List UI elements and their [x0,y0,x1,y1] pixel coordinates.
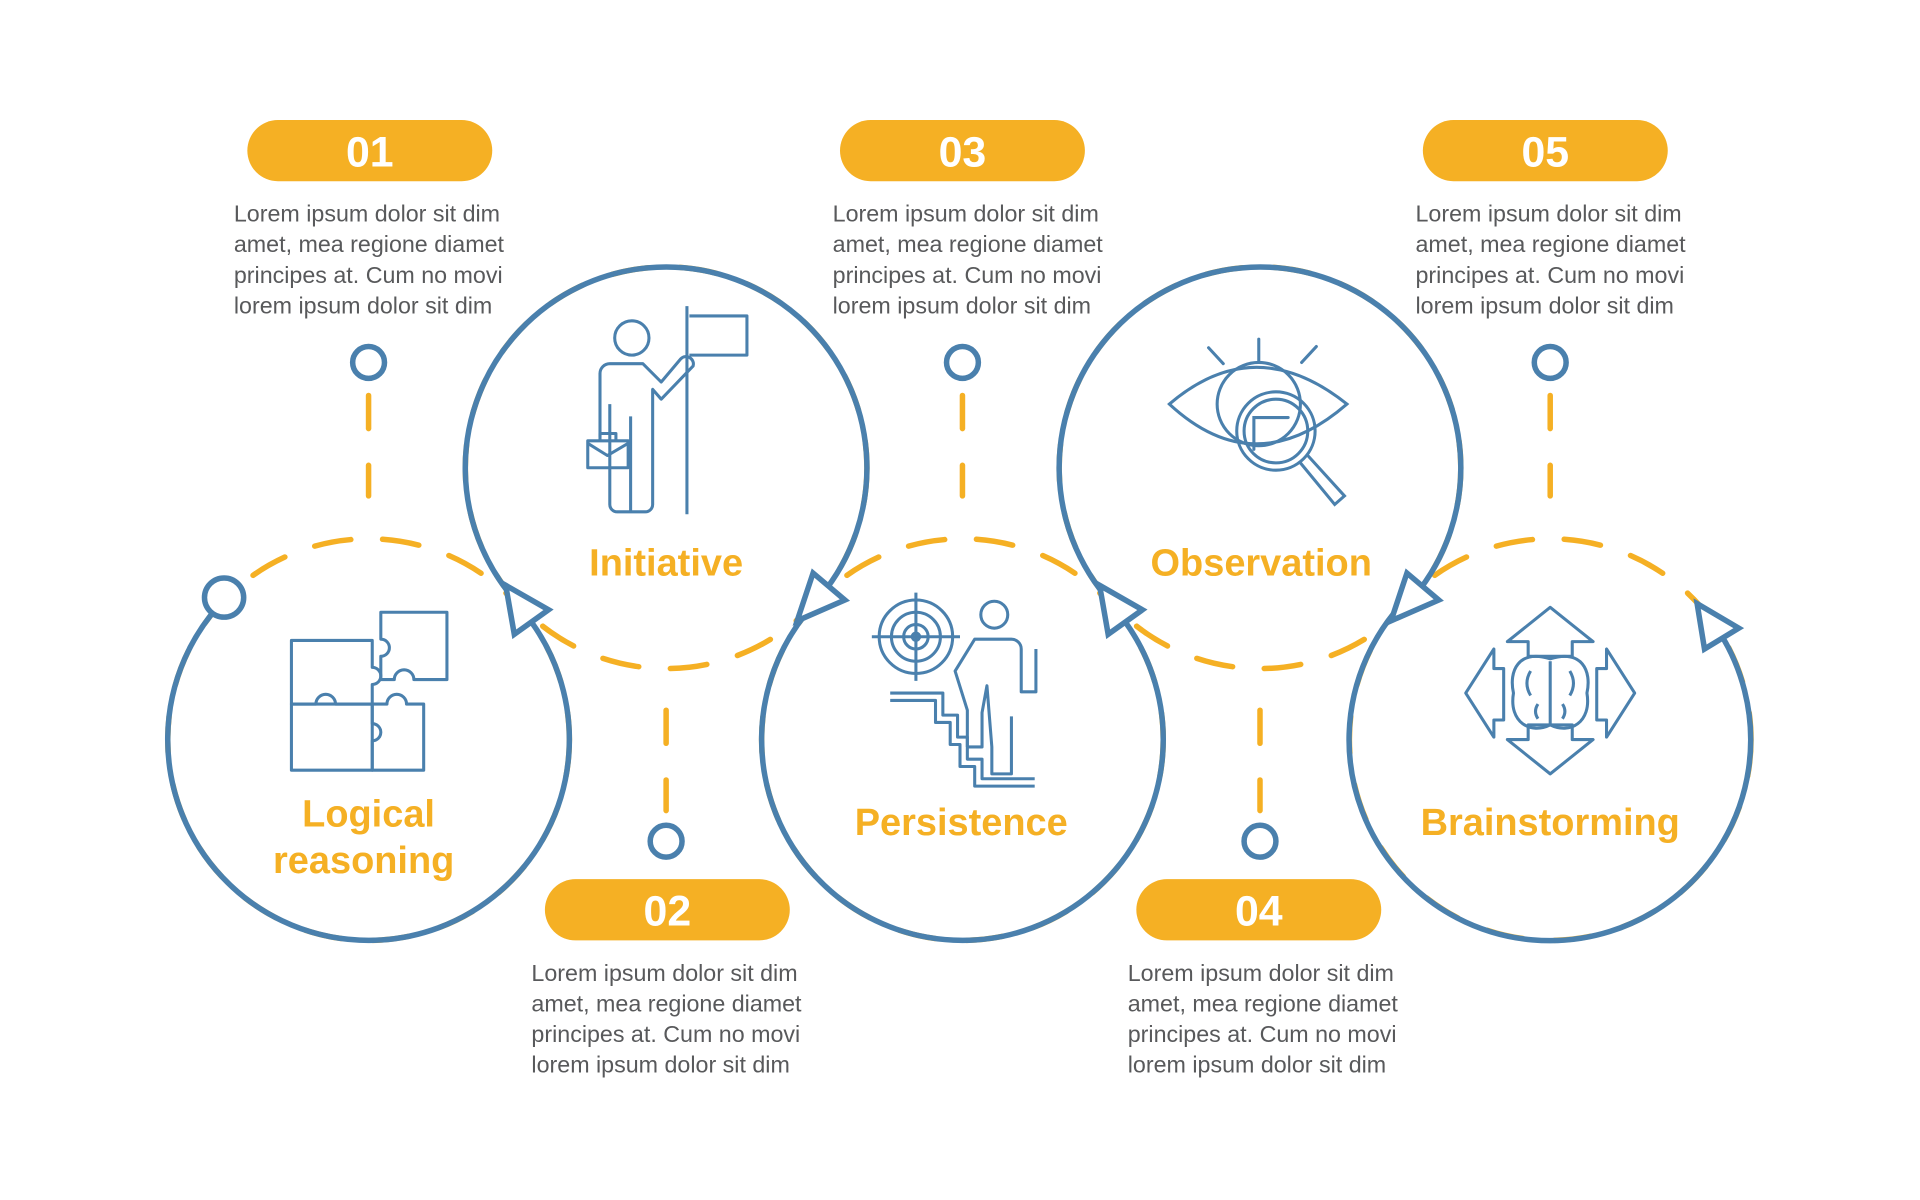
blue circle arcs [168,267,1751,941]
labels: reasoning [273,840,454,882]
step 03: 03 [939,129,986,177]
step 03: Lorem ipsum dolor sit dim [833,201,1099,227]
step 01: principes at. Cum no movi [234,262,503,288]
step 02 [531,879,802,1078]
step 02: 02 [644,888,691,936]
step 01 [234,120,505,318]
step 01: Lorem ipsum dolor sit dim [234,201,500,227]
step 04: Lorem ipsum dolor sit dim [1128,960,1394,986]
step 03: principes at. Cum no movi [833,262,1101,288]
labels: Persistence [855,802,1068,844]
icon: person with flag [588,306,747,514]
step 04: amet, mea regione diamet [1128,990,1398,1016]
dashed yellow circles [168,267,1751,940]
start dot [204,578,244,617]
step 01: lorem ipsum dolor sit dim [234,292,492,318]
step 03: amet, mea regione diamet [833,231,1103,257]
labels: Observation [1151,543,1372,585]
labels: Initiative [589,543,743,585]
step 02: principes at. Cum no movi [531,1021,800,1047]
step 04: principes at. Cum no movi [1128,1021,1397,1047]
step 05 [1416,120,1686,318]
step 02: lorem ipsum dolor sit dim [531,1052,790,1078]
step 04 [1128,879,1398,1078]
step 05: Lorem ipsum dolor sit dim [1416,201,1682,227]
step 03 [833,120,1103,318]
arrowheads [506,573,1739,649]
labels: Brainstorming [1421,802,1680,844]
connectors [369,396,1550,811]
step 01: amet, mea regione diamet [234,231,505,257]
icon: target and stairs [872,593,1036,786]
step 03: lorem ipsum dolor sit dim [833,292,1091,318]
labels [273,543,1680,882]
step 01: 01 [346,129,394,177]
icon: brain with arrows [1466,607,1635,774]
icon: puzzle [291,612,447,770]
step 02: Lorem ipsum dolor sit dim [531,960,798,986]
step 05: lorem ipsum dolor sit dim [1416,292,1674,318]
icon: eye with magnifier [1169,339,1347,504]
step 02: amet, mea regione diamet [531,990,802,1016]
step 05: amet, mea regione diamet [1416,231,1686,257]
step 05: 05 [1521,129,1569,177]
step 04: 04 [1235,888,1283,936]
labels: Logical [302,794,435,836]
step 04: lorem ipsum dolor sit dim [1128,1052,1386,1078]
step 05: principes at. Cum no movi [1416,262,1684,288]
